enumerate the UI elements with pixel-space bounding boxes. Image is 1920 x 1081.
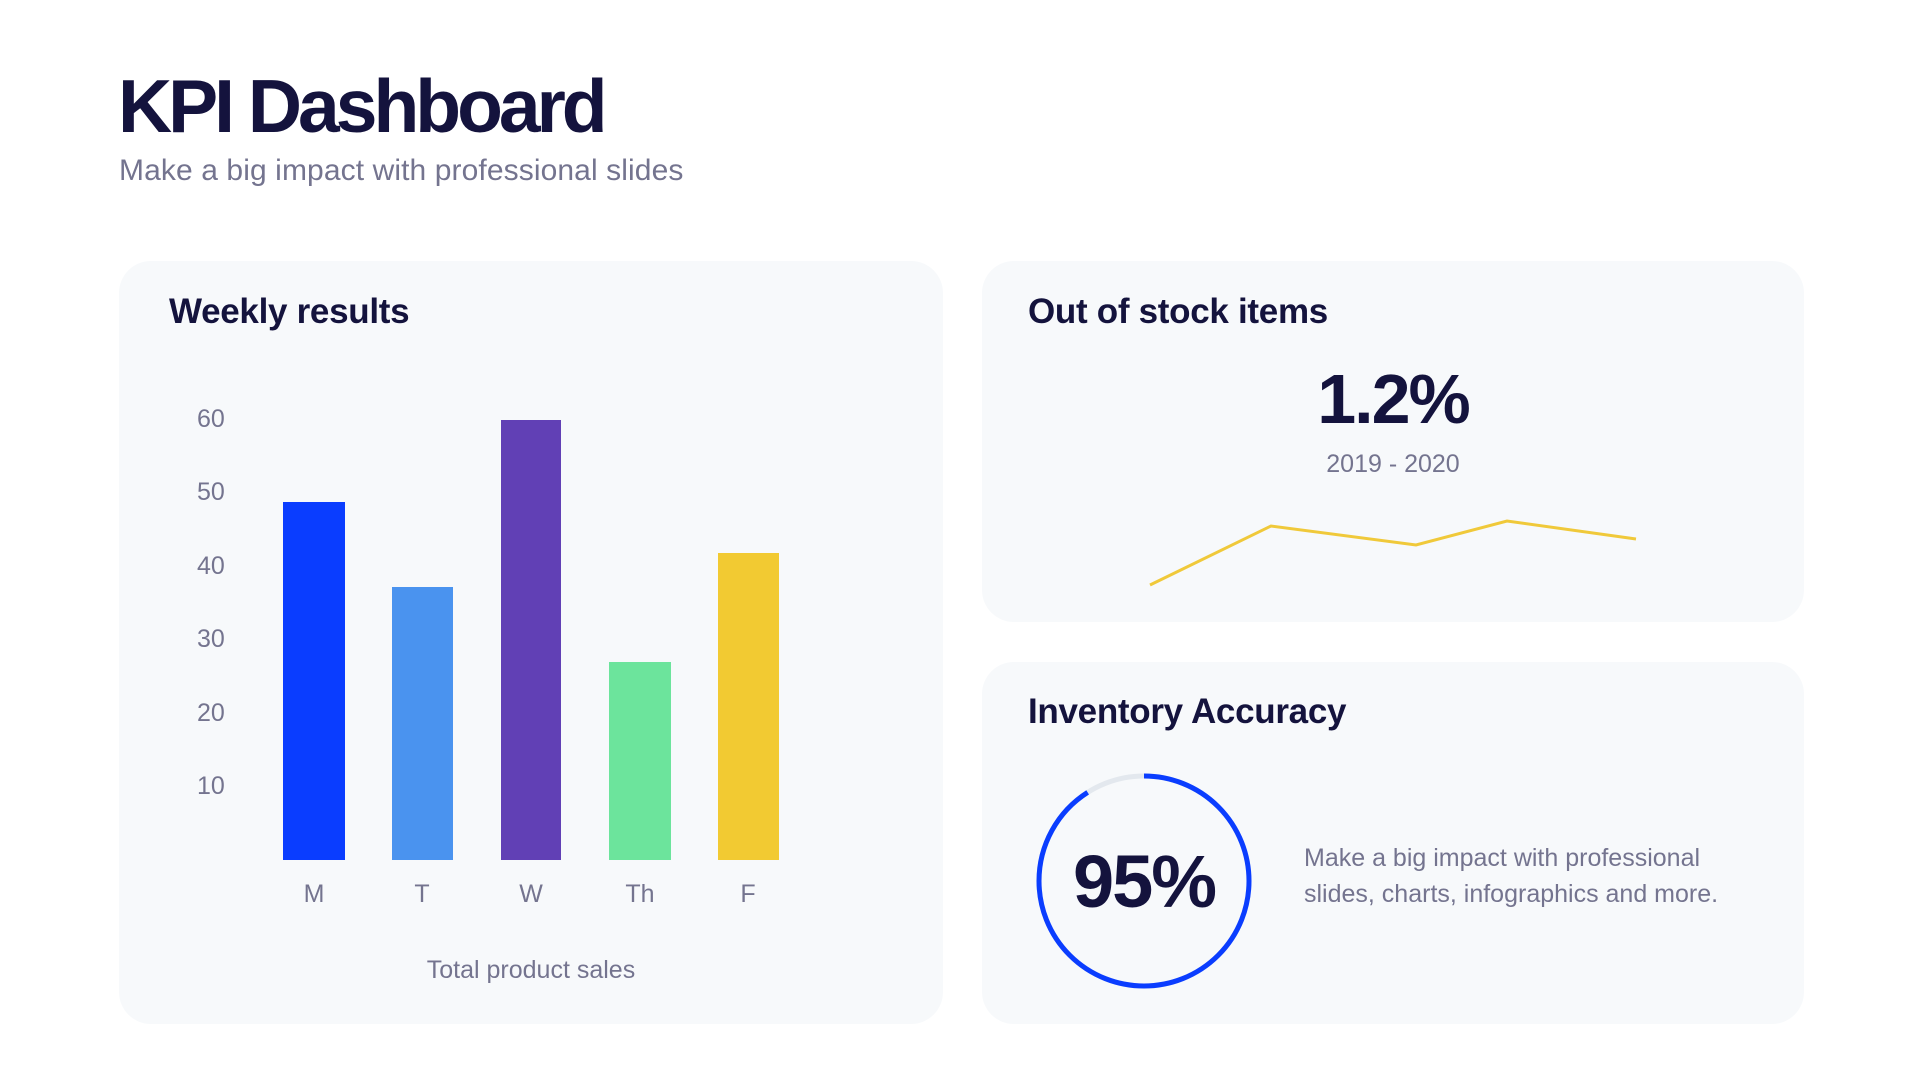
panel: out of stock xyxy=(982,261,1804,622)
title: KPI Dashboard xyxy=(118,64,604,148)
bar chart xyxy=(197,405,779,908)
bar chart: T xyxy=(414,880,430,908)
panel: weekly results xyxy=(119,261,943,1024)
bar chart: Th xyxy=(625,880,655,908)
heading: out of stock: Out of stock items xyxy=(1028,292,1328,331)
bar chart: 20 xyxy=(197,699,225,727)
big number: 1.2% xyxy=(1317,360,1469,438)
line chart xyxy=(1149,520,1636,586)
heading: weekly results: Weekly results xyxy=(169,292,409,331)
bar chart: 10 xyxy=(197,772,225,800)
bar chart: 40 xyxy=(197,552,225,580)
description xyxy=(1304,844,1718,908)
subtitle: Make a big impact with professional slides xyxy=(119,154,683,187)
bar chart: 60 xyxy=(197,405,225,433)
description: slides, charts, infographics and more. xyxy=(1304,880,1718,908)
donut gauge xyxy=(1036,774,1252,988)
description: Make a big impact with professional xyxy=(1304,844,1700,872)
donut gauge: 95% xyxy=(1073,840,1215,923)
bar chart: 30 xyxy=(197,625,225,653)
bar chart: F xyxy=(740,880,756,908)
bar chart: M xyxy=(304,880,324,908)
period: 2019 - 2020 xyxy=(1326,450,1460,478)
caption: Total product sales xyxy=(427,956,635,984)
heading: inventory accuracy: Inventory Accuracy xyxy=(1028,692,1346,731)
bar chart: 50 xyxy=(197,478,225,506)
bar chart: W xyxy=(519,880,543,908)
panel: inventory accuracy xyxy=(982,662,1804,1024)
